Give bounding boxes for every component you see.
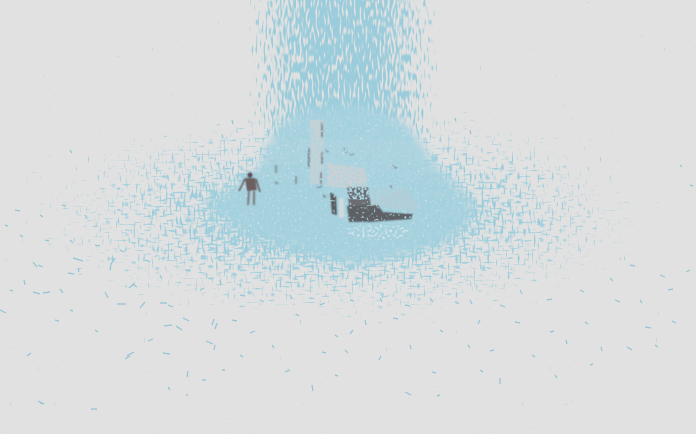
falling water column xyxy=(240,0,445,140)
person: legs xyxy=(248,191,254,205)
spray particles over the truck xyxy=(300,110,423,227)
scattered particle field, horizontal streaks xyxy=(0,94,685,338)
truck: front bumper xyxy=(347,205,413,222)
person: arms xyxy=(239,179,260,192)
truck: front wheel xyxy=(330,192,344,218)
person xyxy=(239,172,260,205)
truck: grille xyxy=(347,187,371,206)
truck: hood xyxy=(370,187,418,212)
truck: trailer side panel xyxy=(327,163,368,190)
person: head xyxy=(247,172,253,178)
scattered particle field, vertical streaks xyxy=(0,95,685,331)
truck: exhaust stack and cab tower xyxy=(309,120,354,184)
person: torso xyxy=(245,178,257,191)
truck: body specks xyxy=(275,165,397,198)
truck xyxy=(275,120,418,222)
sparse outer particles xyxy=(0,118,693,409)
dense splash pool xyxy=(207,104,473,263)
